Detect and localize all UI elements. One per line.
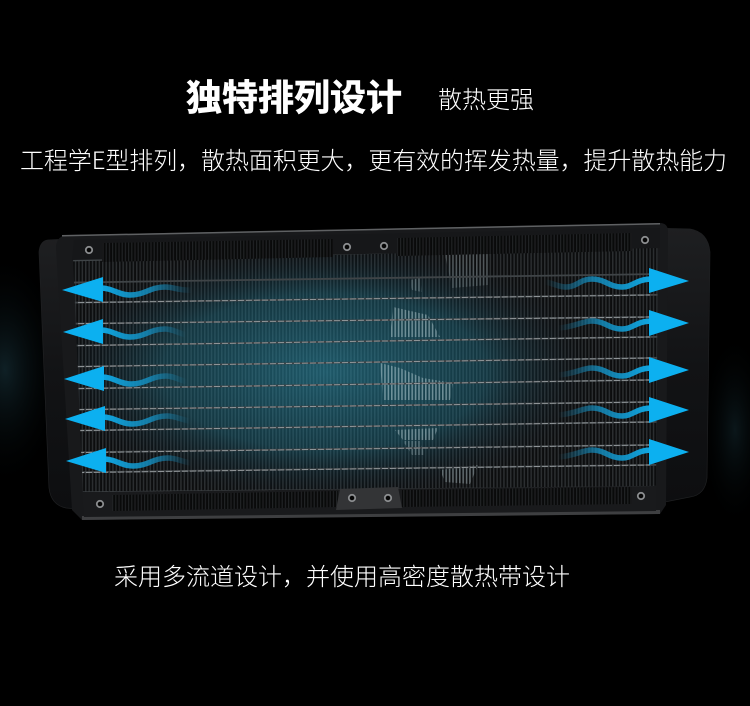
right end tank [650,228,710,505]
radiator [39,223,710,520]
title: 独特排列设计 [186,77,402,118]
arrow right 5 [558,439,689,465]
flat tube lines [70,246,660,492]
airflow glow [90,258,561,486]
arrow left 4 [65,406,190,431]
radiator frame [56,223,668,520]
arrow left 5 [66,448,191,473]
left end tank [39,238,90,510]
arrow right 2 [558,310,689,336]
bottom mounting plate [82,486,656,517]
subtitle: 散热更强 [438,80,534,115]
fan blades seen through fins [380,250,490,484]
arrow right 3 [558,357,689,383]
arrow left 2 [63,319,186,344]
arrows pointing left [62,277,192,473]
arrows pointing right [545,268,689,465]
arrow left 1 [62,277,192,302]
fin core [55,242,660,502]
arrow right 1 [545,268,689,293]
arrow left 3 [64,366,187,391]
bottom caption: 采用多流道设计，并使用高密度散热带设计 [114,557,570,592]
arrow right 4 [558,397,689,423]
top mounting plate [72,228,660,262]
description text: 工程学E型排列，散热面积更大，更有效的挥发热量，提升散热能力 [20,141,727,176]
